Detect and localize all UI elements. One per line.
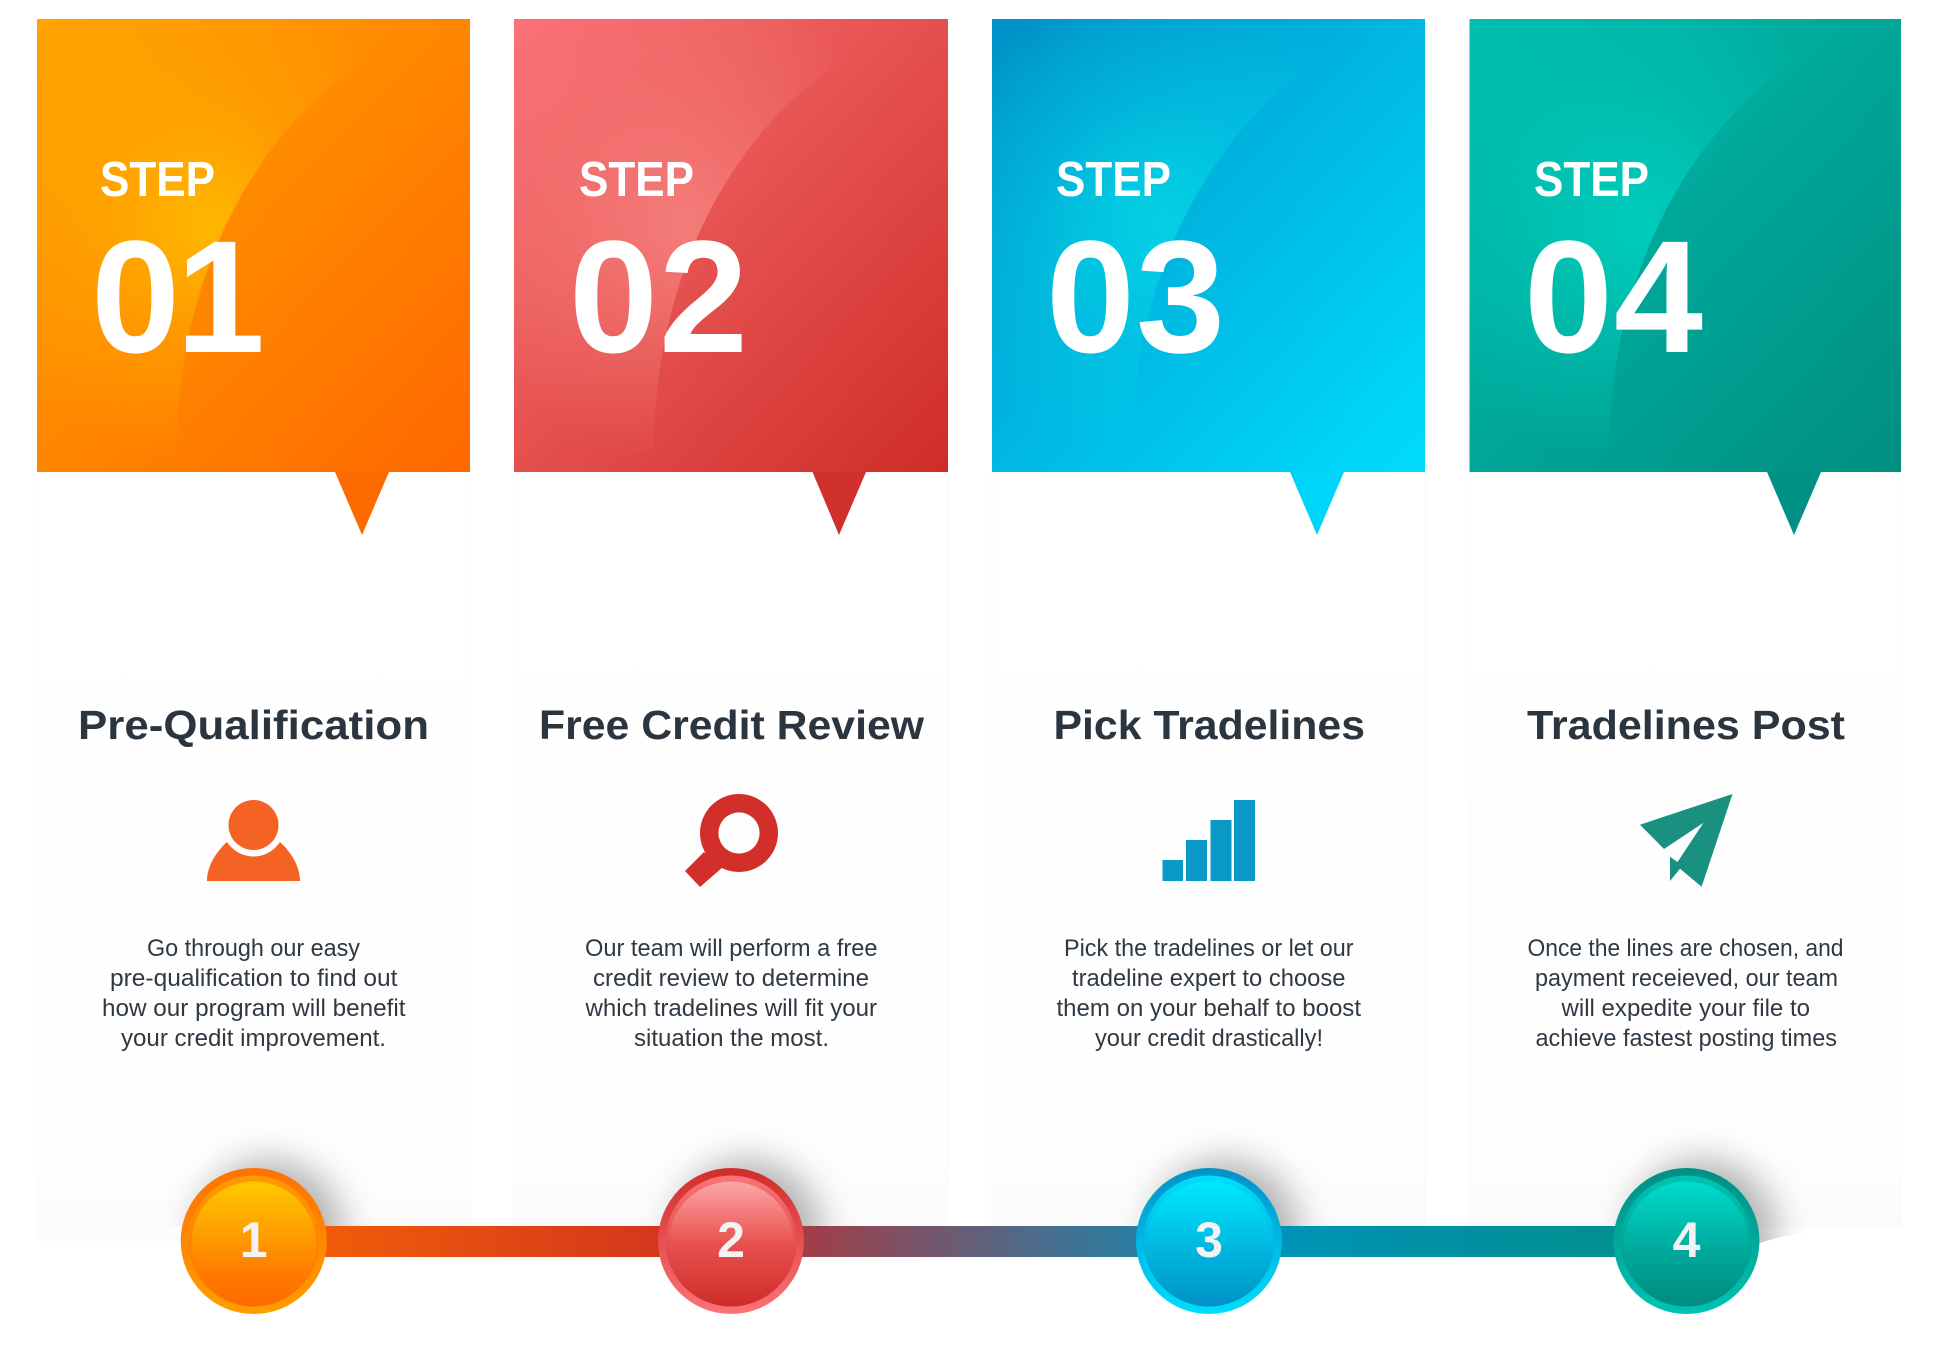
step 2 description: Our team will perform a free <box>585 935 878 962</box>
step 1 header highlight <box>37 19 417 453</box>
step 4 heading: Tradelines Post <box>1527 702 1845 748</box>
timeline shadows <box>198 1160 1775 1304</box>
step 1 description: how our program will benefit <box>102 995 406 1022</box>
step 4 callout pointer <box>1767 472 1821 535</box>
step 3 description: tradeline expert to choose <box>1072 965 1346 992</box>
step 3 heading: Pick Tradelines <box>1054 702 1365 748</box>
panel: step 3 pick tradelines <box>992 19 1425 1226</box>
timeline node 3: 3 <box>1195 1212 1223 1268</box>
step 1 label: STEP <box>100 153 215 207</box>
step 3 callout pointer <box>1290 472 1344 535</box>
step 3 description: your credit drastically! <box>1095 1025 1323 1052</box>
step 2 header highlight <box>514 19 894 453</box>
step 4 description: achieve fastest posting times <box>1536 1025 1837 1052</box>
step 4 description: Once the lines are chosen, and <box>1528 935 1844 962</box>
step 3 label: STEP <box>1056 153 1171 207</box>
step 1 description <box>102 935 406 1052</box>
panel: step 1 pre-qualification <box>37 19 470 1240</box>
step 1 callout pointer <box>335 472 389 535</box>
panel 4 body <box>1470 472 1901 1226</box>
timeline node 4 <box>1614 1168 1760 1314</box>
panel: step 2 free credit review <box>514 19 948 1226</box>
step 2 description <box>584 935 878 1052</box>
step 4 description <box>1528 935 1844 1052</box>
step 2 header block <box>514 19 948 472</box>
step 2 number: 02 <box>569 207 748 386</box>
step 3 number: 03 <box>1046 207 1225 386</box>
timeline node 4: 4 <box>1673 1212 1701 1268</box>
step 1 description: your credit improvement. <box>121 1025 386 1052</box>
timeline node 1: 1 <box>240 1212 268 1268</box>
timeline node 3 <box>1136 1168 1282 1314</box>
step 2 description: credit review to determine <box>593 965 869 992</box>
step 4 number: 04 <box>1524 207 1703 386</box>
panel 2 body <box>514 472 948 1226</box>
step 3 header block <box>992 19 1425 472</box>
icon: paper plane <box>1640 794 1732 887</box>
panel 1 body <box>37 472 470 1240</box>
icon: magnifying glass <box>685 794 778 887</box>
icon: bar chart <box>1162 800 1255 881</box>
timeline node 1 <box>181 1168 327 1314</box>
step 1 number: 01 <box>91 207 265 386</box>
step 2 description: situation the most. <box>634 1025 829 1052</box>
step 4 header block <box>1470 19 1901 472</box>
step 1 header block <box>37 19 470 472</box>
panel: step 4 tradelines post <box>1470 19 1901 1226</box>
step 4 description: will expedite your file to <box>1560 995 1810 1022</box>
step 1 description: pre-qualification to find out <box>110 965 398 992</box>
step 4 label: STEP <box>1534 153 1649 207</box>
step 2 description: which tradelines will fit your <box>584 995 877 1022</box>
step 3 description: them on your behalf to boost <box>1056 995 1361 1022</box>
step 4 header highlight <box>1470 19 1850 453</box>
timeline node 2 <box>658 1168 804 1314</box>
step 1 heading: Pre-Qualification <box>78 702 429 748</box>
step 2 label: STEP <box>579 153 694 207</box>
step 2 callout pointer <box>812 472 866 535</box>
step 3 description <box>1056 935 1361 1052</box>
step 3 header highlight <box>992 19 1372 453</box>
timeline node 2: 2 <box>717 1212 745 1268</box>
step 2 heading: Free Credit Review <box>539 702 924 748</box>
timeline connector bar <box>253 1226 1690 1257</box>
panel 3 body <box>992 472 1425 1226</box>
step 3 description: Pick the tradelines or let our <box>1064 935 1354 962</box>
step 1 description: Go through our easy <box>147 935 360 962</box>
icon: person <box>207 800 300 881</box>
step 4 description: payment receieved, our team <box>1535 965 1838 992</box>
